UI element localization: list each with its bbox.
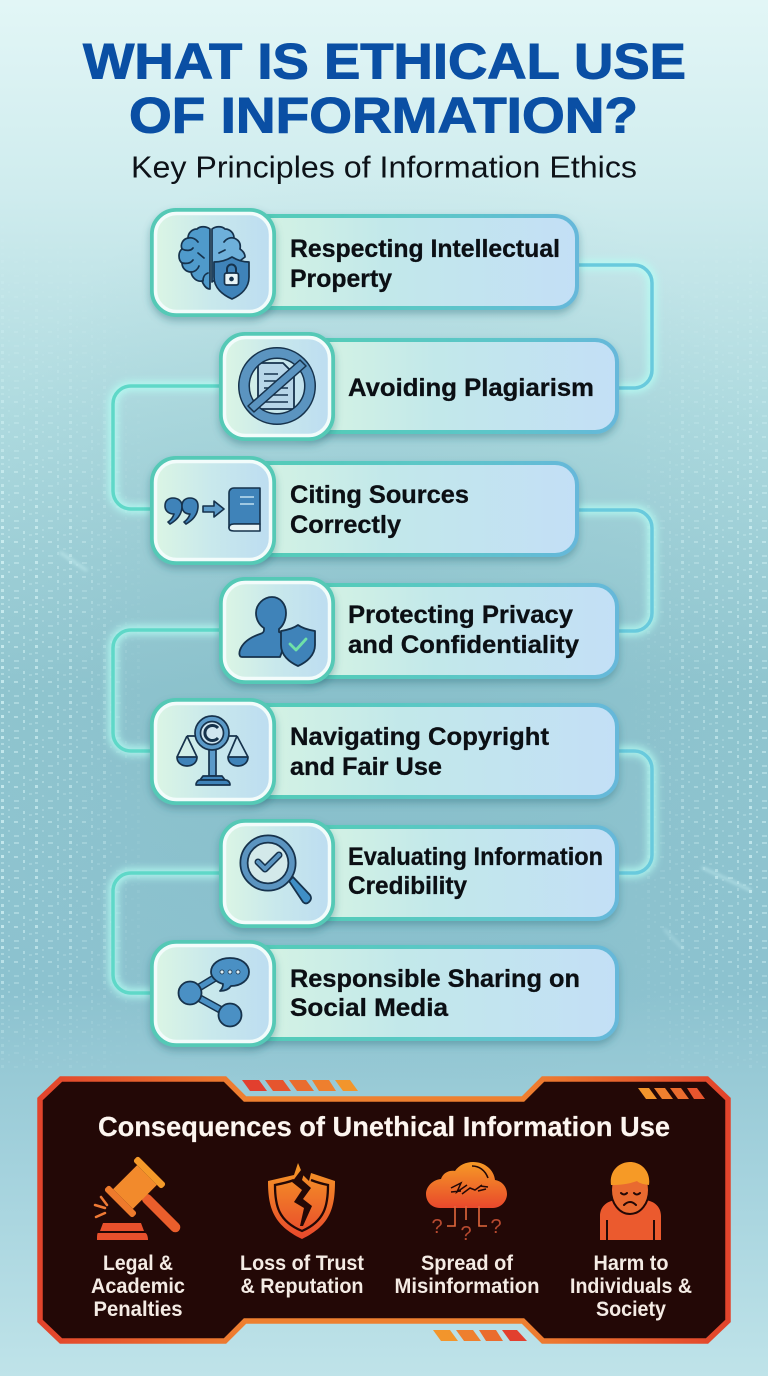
label xyxy=(290,481,469,539)
icon: magnifier with check xyxy=(244,839,311,904)
label xyxy=(290,965,580,1022)
principle 7: responsible sharing xyxy=(152,942,617,1045)
label xyxy=(570,1252,692,1321)
icon: person with shield xyxy=(239,597,315,666)
label xyxy=(290,235,560,293)
title xyxy=(83,34,686,144)
label: & Reputation xyxy=(240,1275,364,1298)
principle 4: protecting privacy xyxy=(221,579,617,682)
heading: Consequences of Unethical Information Use xyxy=(98,1111,670,1142)
label: and Confidentiality xyxy=(348,631,579,659)
label: Legal & xyxy=(103,1252,173,1275)
label: Individuals & xyxy=(570,1275,692,1298)
principle 6: evaluating credibility xyxy=(221,821,617,926)
principle 3: citing sources xyxy=(152,458,577,563)
subtitle: Key Principles of Information Ethics xyxy=(131,150,637,184)
label: Property xyxy=(290,265,392,293)
icon: sad person xyxy=(600,1162,661,1240)
principle 5: navigating copyright xyxy=(152,700,617,803)
label xyxy=(91,1252,185,1321)
label xyxy=(394,1252,540,1298)
label: Responsible Sharing on xyxy=(290,965,580,993)
connectors xyxy=(113,265,652,993)
label xyxy=(348,601,579,659)
icon: share with speech bubble xyxy=(178,958,249,1026)
title: WHAT IS ETHICAL USE xyxy=(83,34,686,90)
label: Social Media xyxy=(290,994,449,1022)
icon: cloud with question marks: ? xyxy=(490,1216,502,1238)
title: OF INFORMATION? xyxy=(129,88,638,144)
decorative stripes xyxy=(242,1080,705,1341)
label: Spread of xyxy=(421,1252,514,1275)
icon: gavel xyxy=(95,1156,196,1248)
icon: no document xyxy=(244,353,310,419)
label: and Fair Use xyxy=(290,753,442,781)
label: Society xyxy=(596,1298,666,1321)
label xyxy=(348,843,603,900)
label: Credibility xyxy=(348,872,467,900)
label: Harm to xyxy=(594,1252,668,1275)
icon: broken shield xyxy=(268,1163,335,1239)
principle 1: respecting intellectual property xyxy=(152,210,577,315)
icon: cloud with question marks xyxy=(426,1162,507,1245)
label xyxy=(240,1252,364,1298)
label: Loss of Trust xyxy=(240,1252,364,1275)
consequence 4: harm to individuals xyxy=(570,1162,692,1321)
label: Misinformation xyxy=(394,1275,540,1298)
label: Respecting Intellectual xyxy=(290,235,560,263)
consequence 2: loss of trust xyxy=(240,1163,364,1298)
icon: brain with shield xyxy=(179,227,249,299)
icon: scales with copyright xyxy=(177,716,248,785)
label: Navigating Copyright xyxy=(290,723,550,751)
label: Academic xyxy=(91,1275,185,1298)
panel: consequences xyxy=(40,1079,728,1341)
principle 2: avoiding plagiarism xyxy=(221,334,617,439)
consequence 1: legal penalties xyxy=(91,1156,196,1321)
label: Evaluating Information xyxy=(348,843,603,871)
label: Citing Sources xyxy=(290,481,469,509)
consequence 3: misinformation xyxy=(394,1162,540,1298)
icon: cloud with question marks: ? xyxy=(431,1216,443,1238)
icon: quote to book xyxy=(165,488,260,531)
label: Protecting Privacy xyxy=(348,601,573,629)
icon: cloud with question marks: ? xyxy=(460,1223,472,1245)
label: Correctly xyxy=(290,511,401,539)
label: Avoiding Plagiarism xyxy=(348,374,594,402)
label xyxy=(290,723,550,781)
label: Penalties xyxy=(94,1298,182,1321)
